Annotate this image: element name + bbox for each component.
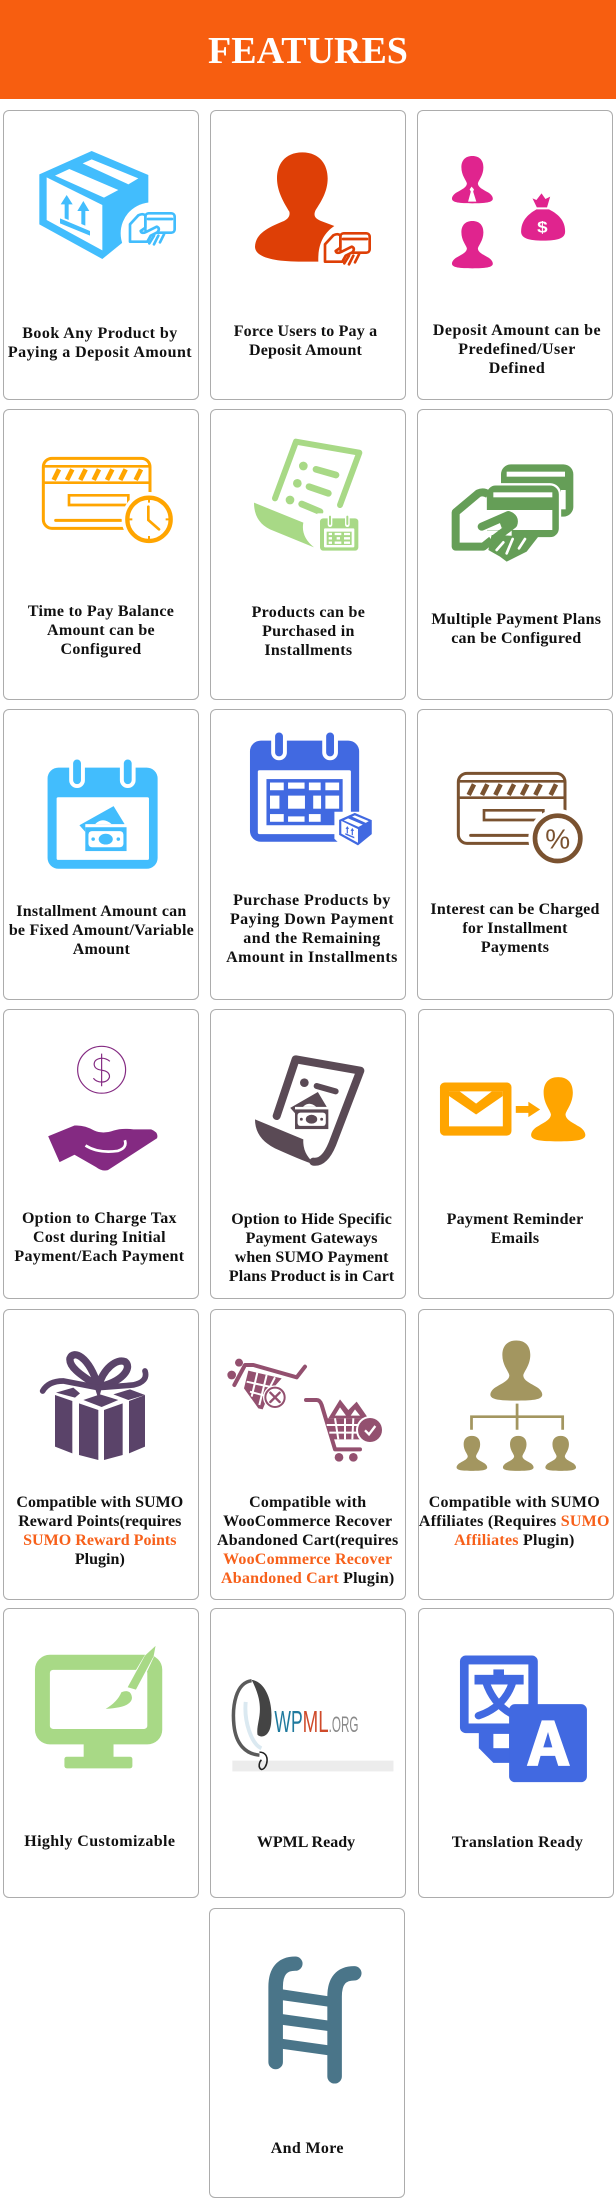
panel: book any product [3, 110, 199, 400]
text: reminder emails: Emails [491, 1230, 539, 1247]
text: multiple plans: can be Configured [451, 630, 581, 647]
icon: card and percent: % [546, 823, 570, 854]
panel: interest [417, 709, 613, 1000]
icon: receipt with money [255, 1055, 364, 1166]
text: hide gateways: when SUMO Payment [235, 1249, 388, 1266]
panel: WPML [210, 1608, 406, 1898]
icon: coin over hand [48, 1046, 158, 1170]
panel: force users [210, 110, 406, 400]
text: and more: And More [271, 2140, 344, 2156]
text: force users: Deposit Amount [249, 342, 362, 359]
icon: person with card [255, 152, 371, 266]
text: down payment: Purchase Products by [233, 892, 391, 909]
text: time to pay: Time to Pay Balance [28, 603, 174, 620]
icon: receipt with calendar [254, 438, 362, 551]
icon: card and percent [456, 772, 583, 864]
panel: recover abandoned cart [210, 1309, 406, 1600]
text: deposit predefined: Defined [489, 360, 545, 377]
panel: deposit amount predefined [417, 110, 613, 400]
icon: affiliate tree [456, 1340, 576, 1471]
text: book any product: Paying a Deposit Amount [8, 344, 192, 361]
icon: carts [227, 1358, 382, 1462]
text: down payment: Paying Down Payment [230, 911, 394, 928]
icon: calendar with money [48, 760, 158, 869]
text: installment amount: Amount [73, 941, 130, 958]
panel: and more [209, 1908, 405, 2198]
icon: translate [460, 1656, 587, 1782]
panel: translation [418, 1608, 614, 1898]
text: interest: Payments [481, 938, 549, 956]
text: hide gateways [229, 1211, 394, 1285]
text: recover abandoned cart: WooCommerce Recover [223, 1550, 392, 1568]
text: tax: Cost during Initial [33, 1228, 166, 1246]
text: recover abandoned cart [217, 1494, 398, 1586]
text: hide gateways: Option to Hide Specific [231, 1211, 392, 1228]
text: purchased in installments: Products can be [252, 604, 365, 621]
text: purchased in installments: Installments [264, 642, 352, 659]
text: tax: Option to Charge Tax [22, 1210, 177, 1226]
text: reward points: Reward Points(requires [18, 1513, 181, 1530]
icon: gift [40, 1351, 148, 1460]
text: hide gateways: Plans Product is in Cart [229, 1268, 394, 1285]
panel: installment amount [3, 709, 199, 1000]
text: time to pay: Configured [61, 641, 141, 658]
icon: monitor and brush [34, 1646, 162, 1768]
text: deposit predefined: Predefined/User [458, 341, 576, 358]
text: installment amount: be Fixed Amount/Variable [9, 922, 194, 939]
text: tax: Payment/Each Payment [14, 1248, 184, 1264]
text: reward points: Plugin) [75, 1551, 125, 1568]
text: reward points [16, 1494, 183, 1568]
text: recover abandoned cart: Compatible with [249, 1494, 366, 1510]
panel: customizable [3, 1608, 199, 1898]
icon: card and clock [42, 456, 173, 544]
text: purchased in installments [252, 604, 365, 659]
text: affiliates: Affiliates Plugin) [454, 1532, 575, 1548]
icon: ladder [268, 1956, 362, 2084]
icon: people and money bag [452, 156, 566, 268]
text: installment amount: Installment Amount can [16, 903, 186, 920]
text: book any product: Book Any Product by [22, 325, 178, 342]
icon: WPML logo: WP [274, 1704, 303, 1739]
text: multiple plans [431, 611, 601, 647]
icon: WPML logo [232, 1679, 394, 1772]
text: time to pay: Amount can be [47, 622, 155, 639]
text: interest: Interest can be Charged [430, 900, 600, 918]
panel: reminder emails [418, 1009, 614, 1299]
panel: tax [3, 1009, 199, 1299]
text: time to pay [28, 603, 174, 658]
text: tax [14, 1210, 184, 1264]
icon: box with card [39, 151, 176, 259]
text: reward points: Compatible with SUMO [16, 1494, 183, 1511]
title [0, 0, 616, 99]
text: deposit predefined [433, 322, 601, 377]
text: affiliates: Affiliates (Requires SUMO [419, 1512, 610, 1530]
text: customizable: Highly Customizable [24, 1833, 175, 1850]
text: deposit predefined: Deposit Amount can be [433, 322, 601, 339]
icon: people and money bag: $ [537, 218, 548, 236]
text: recover abandoned cart: Abandoned Cart Plugin) [221, 1570, 394, 1586]
text: down payment: and the Remaining [243, 930, 381, 947]
text: interest: for Installment [462, 920, 568, 936]
text: purchased in installments: Purchased in [262, 623, 355, 640]
icon: WPML logo: ML [303, 1704, 328, 1739]
text: reminder emails: Payment Reminder [447, 1211, 583, 1228]
text: force users [234, 323, 377, 359]
panel: time to pay [3, 409, 199, 700]
text: installment amount [9, 903, 194, 958]
text: recover abandoned cart: Abandoned Cart(requires [217, 1532, 398, 1548]
panel: affiliates [418, 1309, 614, 1600]
text: down payment: Amount in Installments [226, 949, 398, 966]
text: affiliates [419, 1494, 610, 1548]
title: FEATURES [208, 30, 408, 72]
text: recover abandoned cart: WooCommerce Recover [223, 1512, 392, 1530]
panel: down payment [210, 709, 406, 1000]
text: affiliates: Compatible with SUMO [429, 1494, 600, 1510]
icon: WPML logo: .ORG [328, 1712, 358, 1737]
text: WPML: WPML Ready [257, 1834, 355, 1851]
text: interest [430, 900, 600, 956]
text: reward points: SUMO Reward Points [23, 1532, 177, 1549]
text: down payment [226, 892, 398, 966]
text: force users: Force Users to Pay a [234, 323, 377, 340]
panel: multiple plans [417, 409, 613, 700]
panel: reward points [3, 1309, 199, 1600]
icon: hand with cards [452, 464, 574, 562]
panel: hide gateways [210, 1009, 406, 1299]
icon: envelope to person [440, 1077, 586, 1142]
text: reminder emails [446, 1211, 583, 1247]
panel: installments [210, 409, 406, 700]
text: multiple plans: Multiple Payment Plans [431, 611, 601, 628]
text: hide gateways: Payment Gateways [246, 1230, 378, 1247]
text: translation: Translation Ready [452, 1834, 583, 1851]
icon: calendar with box [250, 732, 372, 846]
text: book any product [8, 325, 192, 361]
